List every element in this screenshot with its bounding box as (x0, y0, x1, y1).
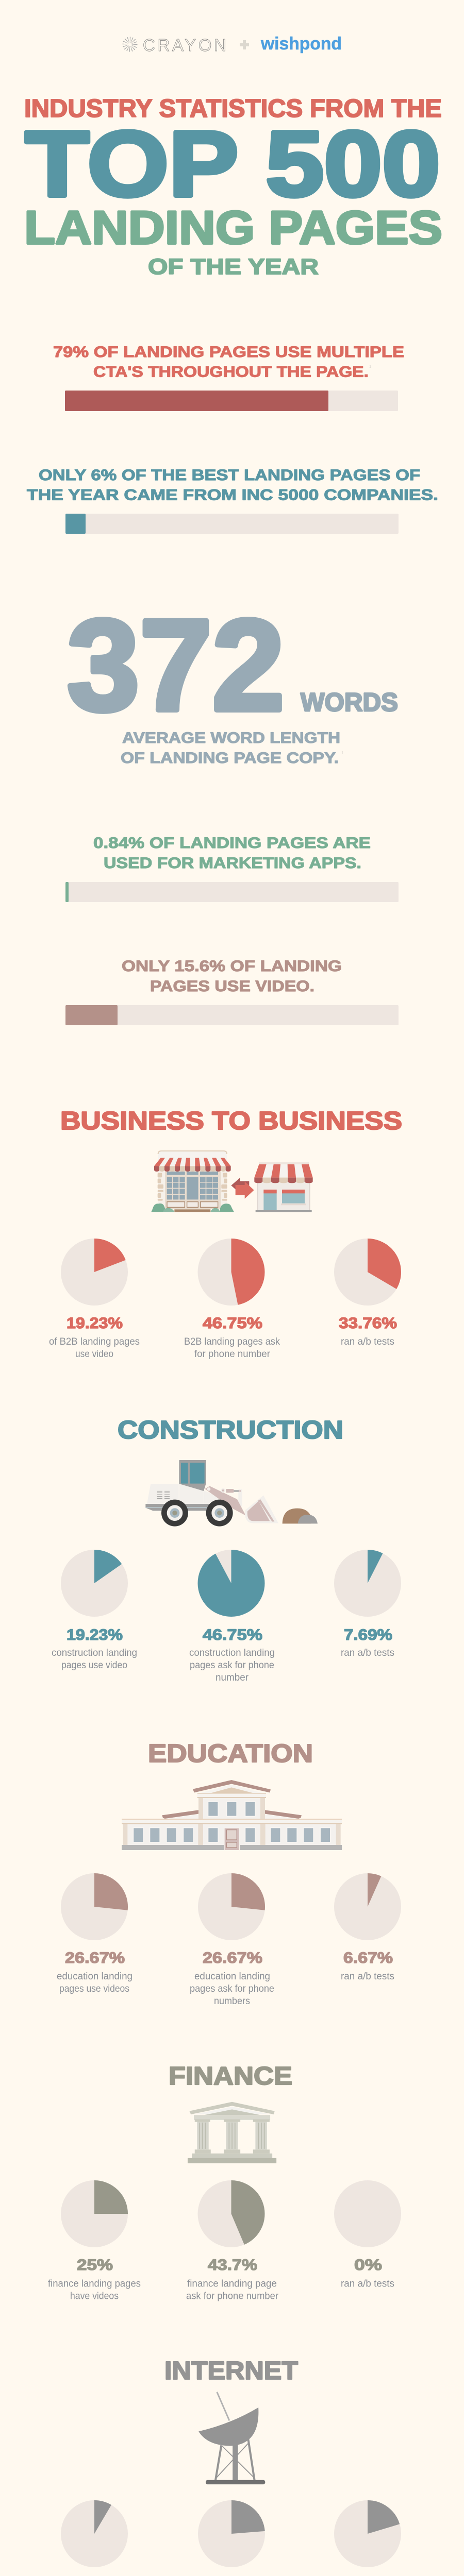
pie: b2b ab tests (334, 1239, 401, 1306)
pie: construction phone (198, 1550, 265, 1617)
progress bar (65, 1005, 399, 1025)
panel: finance (48, 2062, 401, 2302)
percentages: 43.7% (208, 2257, 257, 2274)
percentages: 19.23% (67, 1626, 123, 1643)
pie: b2b phone (198, 1239, 265, 1306)
captions: ran a/b tests (341, 1648, 394, 1658)
percentages: 6.67% (343, 1950, 393, 1967)
stat text: 0.84% OF LANDING PAGES ARE (93, 835, 371, 852)
stat: multiple CTAs: CTA'S THROUGHOUT THE PAGE. (93, 364, 369, 380)
pie: education ab tests (334, 1873, 401, 1940)
percentages (67, 1315, 397, 1332)
stat text: 79% OF LANDING PAGES USE MULTIPLE (53, 344, 404, 361)
percentages: 26.67% (203, 1950, 262, 1967)
stat: marketing apps: USED FOR MARKETING APPS. (104, 855, 361, 872)
wishpond wordmark: wishpond (260, 34, 342, 54)
captions: use video (75, 1349, 113, 1360)
big number: 372 (67, 593, 285, 738)
percentages: 7.69% (344, 1626, 392, 1643)
captions: education landing (57, 1971, 132, 1982)
percentages: 25% (77, 2257, 113, 2274)
progress bar (65, 882, 399, 902)
title line 2: TOP 500 (25, 112, 440, 216)
panel: business to business (49, 1107, 402, 1360)
icon: satellite dish (198, 2392, 265, 2484)
footnote mark: 1 (369, 364, 372, 369)
captions: ran a/b tests (341, 1336, 394, 1347)
icon: crayon sunburst (125, 40, 135, 49)
footnote mark: 1 (341, 751, 344, 755)
percentages: 46.75% (203, 1626, 262, 1643)
percentages (67, 1626, 392, 1643)
captions: for phone number (194, 1349, 271, 1360)
pie: internet video (61, 2500, 128, 2567)
pie: finance phone (198, 2180, 265, 2247)
pie: education video (61, 1873, 128, 1940)
pie: construction ab tests (334, 1550, 401, 1617)
captions: ask for phone number (186, 2291, 279, 2302)
pie: b2b video (61, 1239, 128, 1306)
icon: wheel loader (145, 1460, 318, 1527)
stat: inc 5000 (27, 467, 438, 534)
captions: ran a/b tests (341, 1971, 394, 1982)
percentages (77, 2257, 382, 2274)
pie: education phone (198, 1873, 265, 1940)
captions: of B2B landing pages (49, 1336, 140, 1347)
logo row (125, 34, 342, 55)
captions: finance landing pages (48, 2278, 141, 2290)
captions: number (216, 1672, 249, 1683)
pie: finance ab tests (334, 2180, 401, 2247)
captions (57, 1971, 394, 2007)
percentages: 0% (354, 2257, 382, 2274)
captions: B2B landing pages ask (184, 1336, 280, 1347)
captions: finance landing page (187, 2278, 277, 2290)
title (24, 95, 442, 279)
captions: pages use videos (59, 1984, 129, 1994)
percentages: 33.76% (339, 1315, 397, 1332)
progress bar (65, 391, 398, 411)
heading: BUSINESS TO BUSINESS (60, 1107, 402, 1135)
percentages (65, 1950, 393, 1967)
stat text: ONLY 15.6% OF LANDING (122, 958, 342, 975)
heading: INTERNET (164, 2357, 298, 2385)
heading: FINANCE (169, 2062, 292, 2090)
captions: pages ask for phone (190, 1660, 274, 1671)
title line 3: LANDING PAGES (24, 202, 442, 254)
description: AVERAGE WORD LENGTH (122, 730, 340, 747)
pie: internet phone (198, 2500, 265, 2567)
pie: construction video (61, 1550, 128, 1617)
captions: ran a/b tests (341, 2278, 394, 2290)
percentages: 46.75% (203, 1315, 262, 1332)
panel: education (57, 1740, 401, 2007)
captions (52, 1648, 394, 1683)
icon: bank columns (188, 2102, 276, 2163)
stat: 372 words (67, 593, 398, 767)
captions: construction landing (52, 1648, 137, 1658)
heading: EDUCATION (148, 1740, 313, 1768)
pie: finance video (61, 2180, 128, 2247)
captions: have videos (70, 2291, 119, 2302)
captions: pages ask for phone (190, 1984, 274, 1994)
captions: construction landing (189, 1648, 275, 1658)
progress bar (65, 514, 399, 534)
captions: numbers (214, 1996, 250, 2007)
panel: construction (52, 1416, 401, 1683)
title line 1: INDUSTRY STATISTICS FROM THE (24, 95, 442, 123)
percentages: 26.67% (65, 1950, 125, 1967)
pie: internet ab tests (334, 2500, 401, 2567)
captions (48, 2278, 394, 2302)
icon: plus (240, 40, 249, 49)
heading: CONSTRUCTION (118, 1416, 343, 1444)
stat: video (65, 958, 399, 1025)
stat: video: PAGES USE VIDEO. (150, 978, 314, 995)
words label: WORDS (301, 688, 398, 717)
icon: school building (122, 1780, 342, 1850)
stat text: ONLY 6% OF THE BEST LANDING PAGES OF (39, 467, 420, 484)
stat: inc 5000: THE YEAR CAME FROM INC 5000 COMPANIES. (27, 486, 438, 504)
title line 4: OF THE YEAR (148, 255, 319, 279)
crayon wordmark: CRAYON (143, 36, 226, 55)
captions: pages use video (61, 1660, 127, 1671)
captions: education landing (194, 1971, 270, 1982)
stat: 372 words: OF LANDING PAGE COPY. (121, 750, 339, 767)
percentages: 19.23% (67, 1315, 123, 1332)
stat: multiple CTAs (53, 344, 404, 411)
panel: internet (47, 2357, 401, 2576)
stat: marketing apps (65, 835, 399, 902)
icon: two storefronts with arrows (151, 1151, 313, 1212)
captions (49, 1336, 394, 1360)
